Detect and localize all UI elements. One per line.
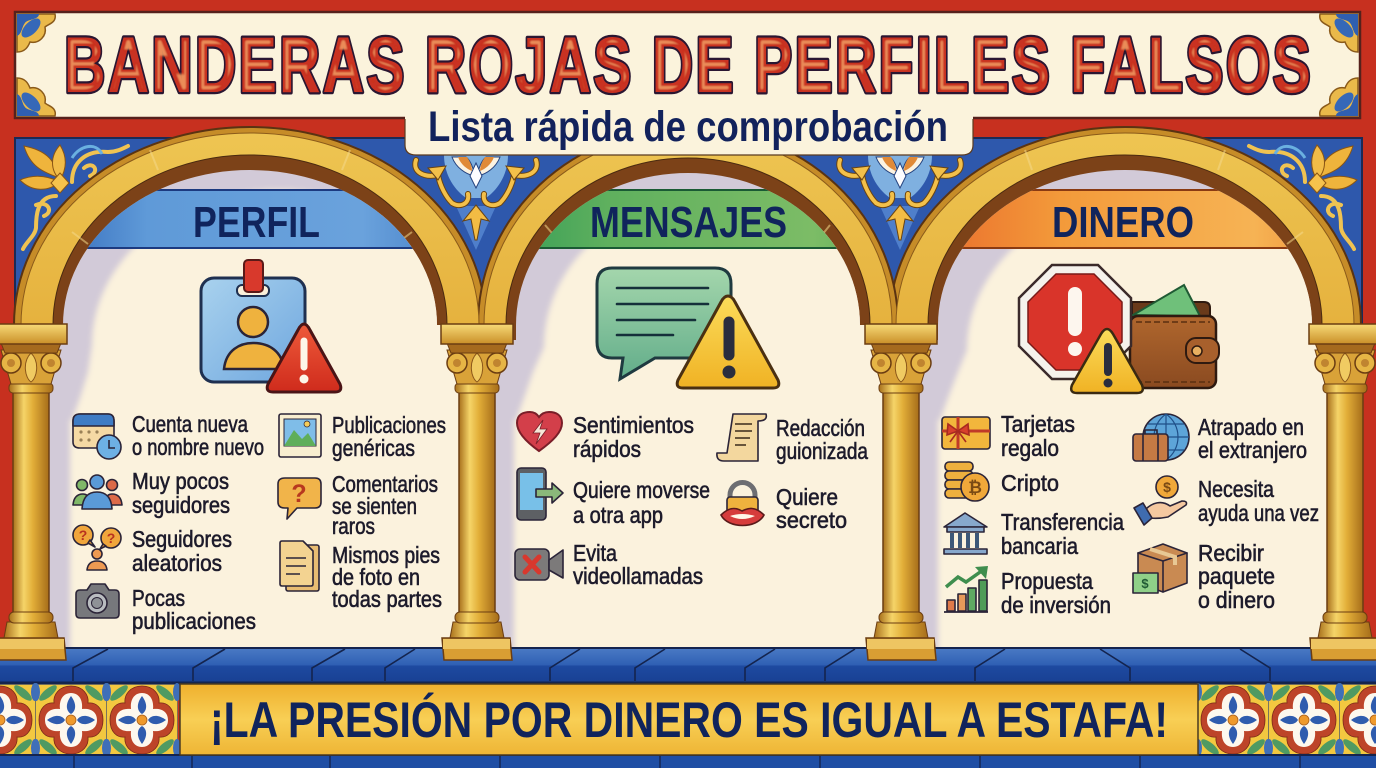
list item: necesita ayuda una vez: $ <box>1163 479 1171 495</box>
list item: tarjetas regalo: Tarjetas <box>1001 411 1075 437</box>
lower blue tile row <box>0 755 1376 768</box>
list item: recibir paquete o dinero <box>1133 540 1275 613</box>
list item: mismos pies de foto: todas partes <box>332 586 442 612</box>
list item: comentarios raros: se sienten <box>332 493 417 519</box>
icon: chat bubble with warning <box>597 268 779 388</box>
list item: necesita ayuda una vez: ayuda una vez <box>1198 500 1319 526</box>
list item: quiere moverse a otra app: Quiere moverse <box>573 477 710 503</box>
panel: perfil interior <box>50 170 458 647</box>
band: dinero heading: DINERO <box>1052 198 1194 247</box>
list item: comentarios raros: ? <box>291 480 307 508</box>
list item: mismos pies de foto: Mismos pies <box>332 542 440 568</box>
columns <box>0 324 1376 660</box>
list item: transferencia bancaria: bancaria <box>1001 533 1078 559</box>
list item: recibir paquete o dinero: Recibir <box>1198 540 1264 566</box>
list item: cuenta nueva: o nombre nuevo <box>132 434 264 460</box>
list item: propuesta de inversion: de inversión <box>1001 592 1111 618</box>
decorative tile strip right <box>1194 683 1376 757</box>
list item: quiere secreto: Quiere <box>776 484 838 510</box>
list item: redaccion guionizada <box>717 414 868 464</box>
title panel <box>15 12 1360 118</box>
list item: publicaciones genericas: Publicaciones <box>332 412 446 438</box>
list item: evita videollamadas: videollamadas <box>573 563 703 589</box>
list item: mismos pies de foto: de foto en <box>332 564 420 590</box>
list item: atrapado en el extranjero: el extranjero <box>1198 437 1307 463</box>
list item: quiere secreto <box>721 482 847 533</box>
ledge of blue tiles <box>0 648 1376 684</box>
list item: tarjetas regalo <box>942 411 1075 461</box>
list item: redaccion guionizada: Redacción <box>776 415 865 441</box>
list item: comentarios raros: Comentarios <box>332 471 438 497</box>
list item: recibir paquete o dinero: $ <box>1141 576 1149 591</box>
list item: sentimientos rapidos: Sentimientos <box>573 412 694 438</box>
list item: seguidores aleatorios: ? <box>79 527 87 543</box>
decorative tile strip left <box>0 683 181 757</box>
list item: publicaciones genericas <box>279 412 446 461</box>
band: mensajes heading <box>539 189 837 249</box>
list item: quiere secreto: secreto <box>776 507 847 533</box>
list item: redaccion guionizada: guionizada <box>776 438 868 464</box>
banner: warning statement <box>180 684 1198 755</box>
list item: quiere moverse a otra app <box>517 468 710 528</box>
list item: comentarios raros <box>278 471 438 539</box>
list item: quiere moverse a otra app: a otra app <box>573 502 663 528</box>
list item: evita videollamadas: Evita <box>573 540 617 566</box>
list item: cripto <box>945 462 1059 501</box>
list item: seguidores aleatorios <box>73 525 232 576</box>
list item: pocas publicaciones <box>76 584 256 634</box>
list item: sentimientos rapidos: rápidos <box>573 436 641 462</box>
band: perfil heading <box>87 189 413 249</box>
gold arches <box>13 126 1362 340</box>
panel: dinero interior <box>920 170 1326 647</box>
list item: propuesta de inversion: Propuesta <box>1001 568 1093 594</box>
banner: warning statement: ¡LA PRESIÓN POR DINERO ES IGUAL A ESTAFA! <box>210 692 1168 748</box>
blue tiled spandrel wall <box>15 138 1362 338</box>
list item: atrapado en el extranjero: Atrapado en <box>1198 414 1304 440</box>
list item: cripto: Cripto <box>1001 470 1059 496</box>
list item: cuenta nueva <box>73 411 264 460</box>
list item: pocas publicaciones: publicaciones <box>132 608 256 634</box>
band: mensajes heading: MENSAJES <box>590 198 787 247</box>
icon: id badge with warning <box>201 260 341 392</box>
list item: seguidores aleatorios: aleatorios <box>132 550 222 576</box>
list item: recibir paquete o dinero: paquete <box>1198 563 1275 589</box>
list item: muy pocos seguidores <box>73 468 230 518</box>
list item: mismos pies de foto <box>280 541 442 612</box>
list item: atrapado en el extranjero <box>1133 414 1307 463</box>
list item: cuenta nueva: Cuenta nueva <box>132 411 248 437</box>
list item: publicaciones genericas: genéricas <box>332 435 415 461</box>
icon: stop sign, warning and wallet <box>1019 265 1219 393</box>
list item: muy pocos seguidores: Muy pocos <box>132 468 229 494</box>
list item: propuesta de inversion <box>944 566 1111 618</box>
list item: muy pocos seguidores: seguidores <box>132 492 230 518</box>
subtitle tab <box>405 110 973 155</box>
list item: necesita ayuda una vez <box>1134 476 1319 526</box>
list item: seguidores aleatorios: ? <box>107 530 115 546</box>
list item: transferencia bancaria: Transferencia <box>1001 509 1124 535</box>
list item: pocas publicaciones: Pocas <box>132 585 185 611</box>
list item: recibir paquete o dinero: o dinero <box>1198 587 1275 613</box>
list item: transferencia bancaria <box>944 509 1124 559</box>
list item: necesita ayuda una vez: Necesita <box>1198 476 1274 502</box>
list item: cripto: ₿ <box>968 478 982 497</box>
list item: seguidores aleatorios: Seguidores <box>132 526 232 552</box>
list item: sentimientos rapidos <box>517 412 694 462</box>
subtitle: Lista rápida de comprobación <box>428 103 948 151</box>
band: dinero heading <box>962 189 1288 249</box>
band: perfil heading: PERFIL <box>193 198 320 247</box>
list item: evita videollamadas <box>515 540 703 589</box>
list item: comentarios raros: raros <box>332 513 375 539</box>
list item: tarjetas regalo: regalo <box>1001 435 1059 461</box>
panel: mensajes interior <box>496 173 882 647</box>
